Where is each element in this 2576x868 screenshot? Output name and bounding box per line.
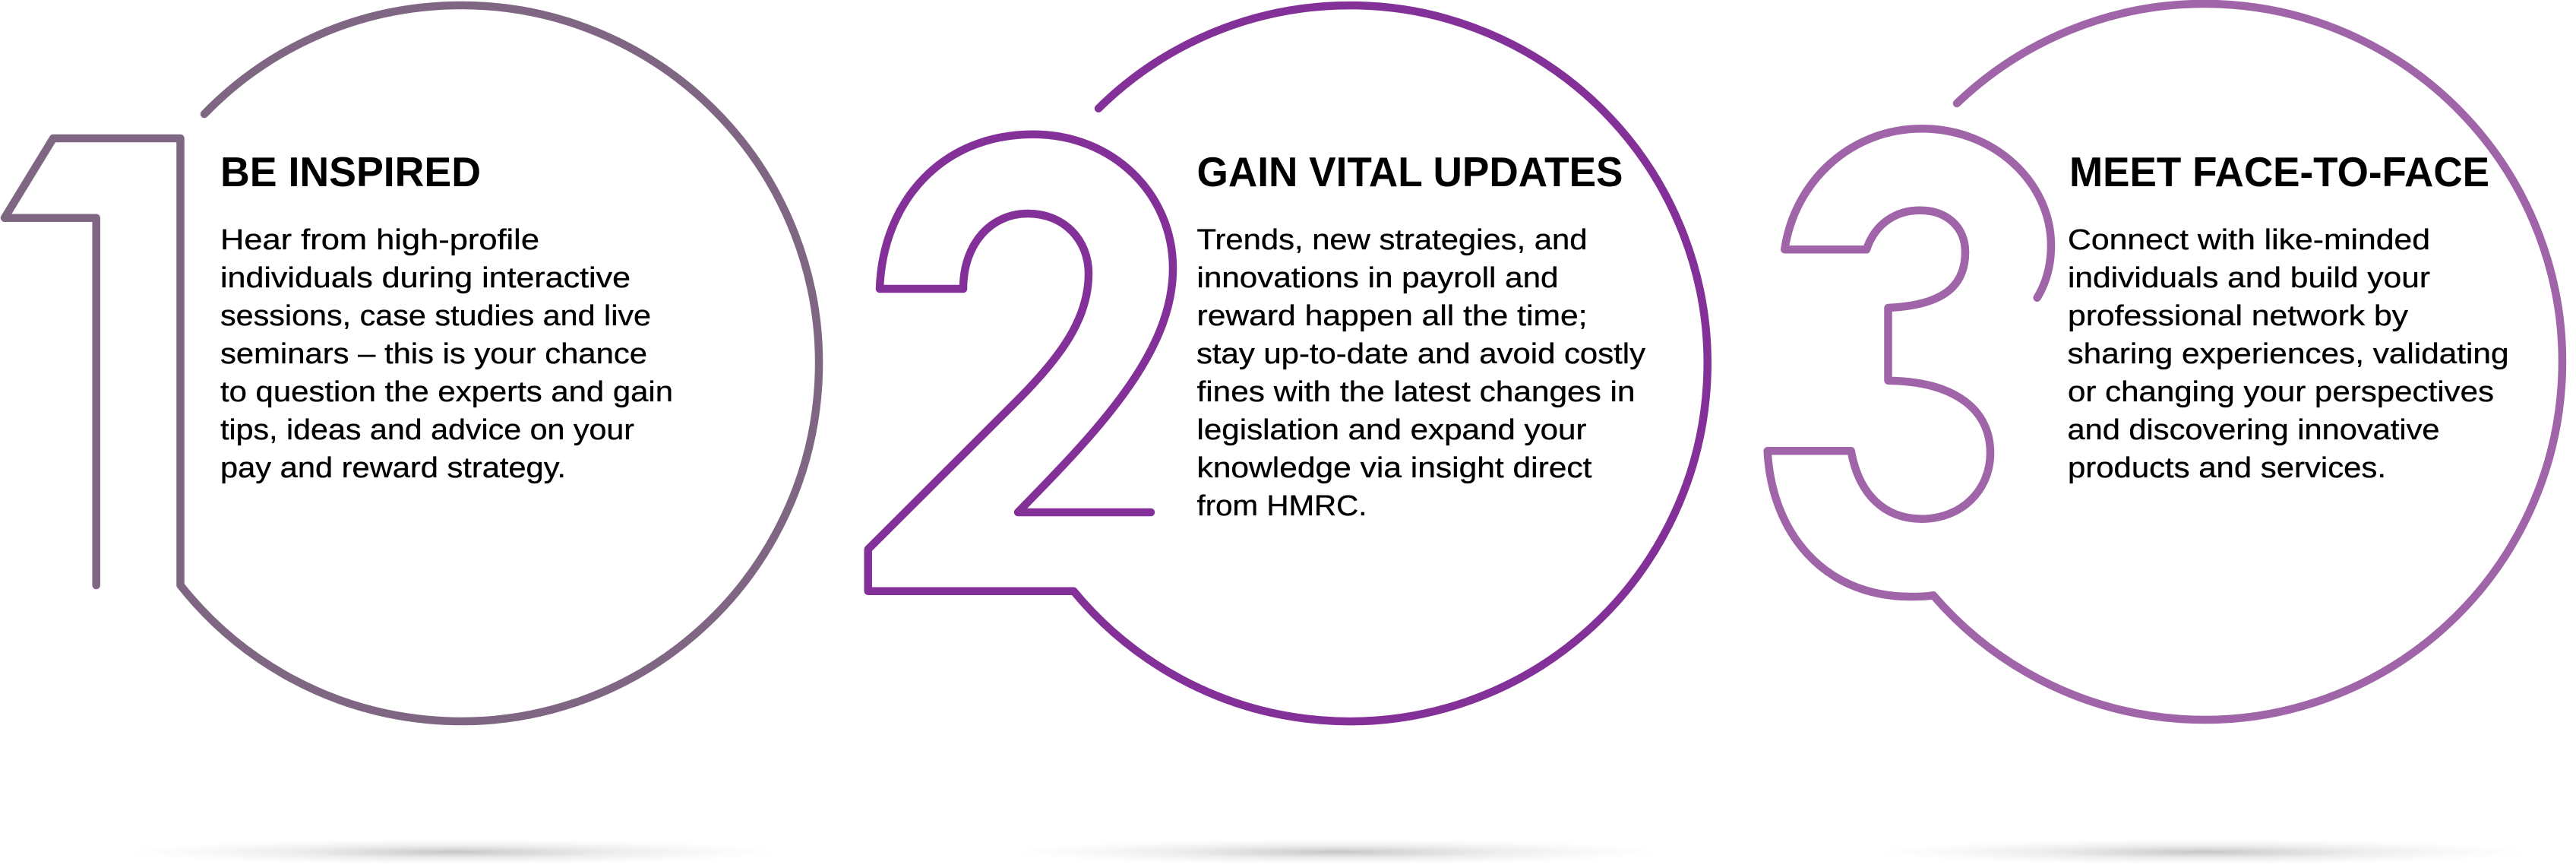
- heading: gain vital updates: GAIN VITAL UPDATES: [1197, 148, 1623, 195]
- body text: meet face-to-face: Connect with like-minded: [2068, 224, 2430, 256]
- body text: be inspired: pay and reward strategy.: [220, 452, 566, 484]
- body text: gain vital updates: knowledge via insight direct: [1197, 452, 1592, 484]
- body text: gain vital updates: fines with the latest changes in: [1197, 376, 1635, 408]
- ground shadow 1: [128, 839, 781, 865]
- heading: be inspired: BE INSPIRED: [220, 148, 481, 195]
- body text: be inspired: individuals during interactive: [220, 262, 631, 294]
- body text: gain vital updates: legislation and expand your: [1197, 414, 1587, 446]
- body text: gain vital updates: [1196, 224, 1645, 522]
- body text: meet face-to-face: or changing your perspectives: [2068, 376, 2494, 408]
- panel: gain vital updates: [868, 5, 1708, 865]
- numeral 1 merged with circle outline: [5, 5, 819, 721]
- body text: gain vital updates: reward happen all the time;: [1197, 300, 1588, 332]
- body text: be inspired: sessions, case studies and live: [220, 300, 651, 332]
- body text: be inspired: to question the experts and gain: [220, 376, 673, 408]
- body text: be inspired: seminars – this is your chance: [220, 338, 647, 370]
- body text: be inspired: Hear from high-profile: [220, 224, 539, 256]
- body text: meet face-to-face: [2068, 224, 2508, 484]
- panel: be inspired: [5, 5, 819, 865]
- numeral 2 merged with circle outline: [868, 5, 1708, 721]
- ground shadow 3: [1876, 839, 2530, 865]
- body text: be inspired: tips, ideas and advice on your: [220, 414, 634, 446]
- body text: meet face-to-face: and discovering innovative: [2068, 414, 2440, 446]
- body text: meet face-to-face: sharing experiences, validating: [2068, 338, 2508, 370]
- body text: gain vital updates: Trends, new strategies, and: [1197, 224, 1588, 256]
- numeral 3 merged with circle outline: [1768, 4, 2562, 720]
- panel: meet face-to-face: [1768, 4, 2562, 865]
- body text: meet face-to-face: individuals and build your: [2068, 262, 2430, 294]
- body text: gain vital updates: from HMRC.: [1197, 490, 1367, 522]
- heading: meet face-to-face: MEET FACE-TO-FACE: [2069, 148, 2489, 195]
- ground shadow 2: [1010, 839, 1664, 865]
- body text: gain vital updates: innovations in payroll and: [1197, 262, 1559, 294]
- body text: gain vital updates: stay up-to-date and avoid costly: [1196, 338, 1645, 370]
- body text: be inspired: [220, 224, 673, 484]
- body text: meet face-to-face: professional network by: [2068, 300, 2408, 332]
- body text: meet face-to-face: products and services.: [2068, 452, 2386, 484]
